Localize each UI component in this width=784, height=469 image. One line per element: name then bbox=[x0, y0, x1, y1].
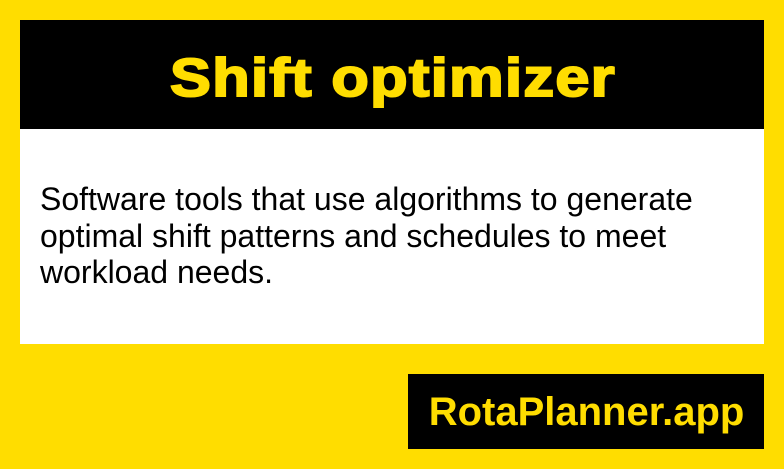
description text bbox=[40, 181, 693, 290]
description text: optimal shift patterns and schedules to meet bbox=[40, 218, 666, 254]
description text: workload needs. bbox=[40, 254, 273, 290]
header banner bbox=[20, 20, 764, 129]
brand badge bbox=[408, 374, 764, 449]
panel: definition bbox=[20, 129, 764, 344]
title: Shift optimizer bbox=[170, 48, 616, 108]
description text: Software tools that use algorithms to generate bbox=[40, 181, 693, 217]
brand badge: RotaPlanner.app bbox=[429, 390, 744, 434]
